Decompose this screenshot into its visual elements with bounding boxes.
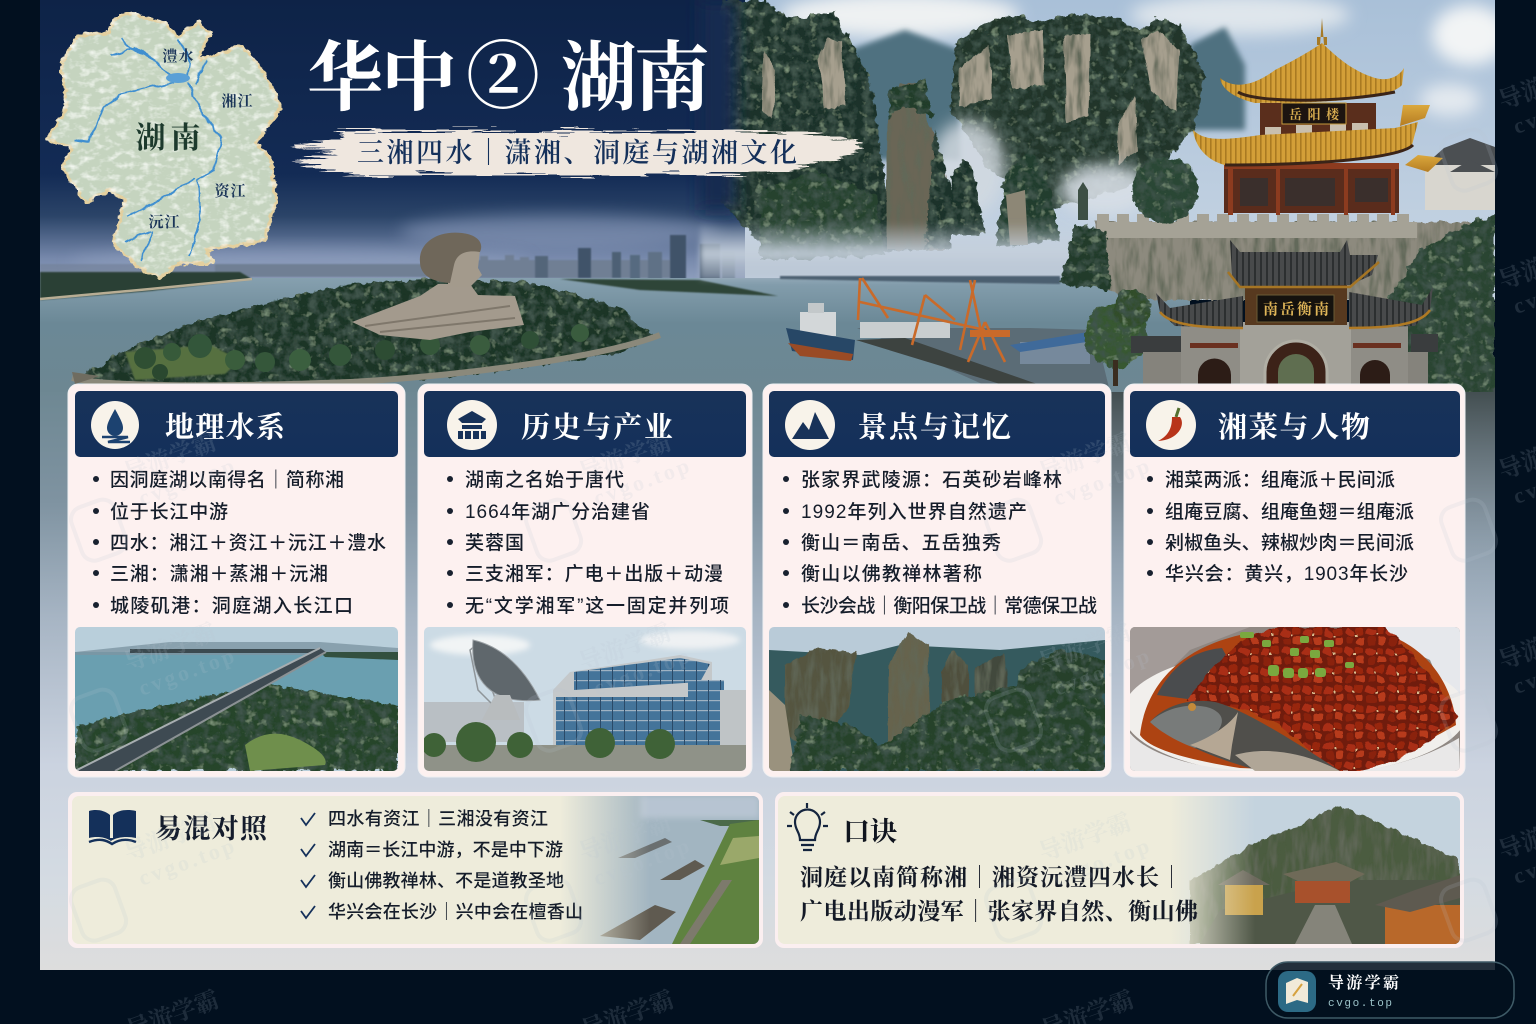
watermark tiles: cvgo.top [590,642,695,701]
white side building [1425,138,1495,210]
subtitle brush banner [288,131,860,175]
photo: bridge [75,627,398,771]
rock pillars [760,80,1060,260]
watermark tiles: 导游学霸 [1035,429,1135,487]
logo badge: 导游学霸 [1328,974,1399,992]
statue [352,233,524,340]
panel: mnemonic [775,792,1464,948]
bullet list: scenery: 张家界武陵源：石英砂岩峰林 [801,469,1062,491]
Nanyue gate: 南岳衡南 [1263,300,1329,318]
panel: cuisine and people [1123,384,1467,777]
watermark tiles: cvgo.top [135,832,240,891]
icon: palace [447,400,497,450]
watermark tiles: cvgo.top [135,642,240,701]
heading: mnemonic: 口诀 [843,817,897,847]
port with ship and cranes [786,278,1110,392]
check list: 华兴会在长沙｜兴中会在檀香山 [328,902,583,922]
bullet list: geography [93,469,386,617]
trees [1060,157,1495,400]
bullet list: cuisine: 华兴会：黄兴，1903年长沙 [1165,563,1408,585]
watermark tiles: cvgo.top [1050,642,1155,701]
icon: light bulb [787,803,828,850]
icon: water drop [91,401,139,449]
logo badge [1266,962,1514,1018]
mnemonic text [800,865,1198,924]
map of Hunan: 沅江 [148,213,180,231]
bullet list: cuisine: 组庵豆腐、组庵鱼翅＝组庵派 [1165,501,1414,523]
panel: scenery [763,384,1111,777]
mnemonic text: 广电出版动漫军｜张家界自然、衡山佛 [800,898,1198,924]
icon: chili pepper [1146,400,1196,450]
photo: chopped chili fish head [1123,627,1467,776]
Zhangjiajie peaks [720,0,1205,255]
watermark tiles: 导游学霸 [1035,619,1135,677]
photo: sandstone peaks [769,627,1105,771]
bullet list: geography: 三湘：潇湘＋蒸湘＋沅湘 [110,563,328,585]
hero landscape photo collage [40,0,1508,400]
map of Hunan: 湘江 [222,92,252,110]
map of Hunan: 湖南 [136,122,200,155]
mist band [700,222,1110,280]
icon: open book [89,810,136,844]
title: 湖南 [561,37,710,121]
bullet list: cuisine: 剁椒鱼头、辣椒炒肉＝民间派 [1165,532,1414,554]
Yueyang Tower: 岳阳楼 [1289,107,1340,122]
bullet list: history [447,468,729,617]
panel: geography [68,384,405,777]
island trees [134,324,589,380]
Nanyue gate [1131,240,1438,392]
watermark tiles: 导游学霸 [120,809,220,867]
watermark tiles: 导游学霸 [1035,809,1135,867]
bullet list: scenery: 衡山以佛教禅林著称 [801,563,982,585]
watermark tiles: 导游学霸 [120,619,220,677]
map of Hunan: 澧水 [162,47,194,65]
watermark tiles: cvgo.top [135,452,240,511]
bullet list: cuisine: 湘菜两派：组庵派＋民间派 [1165,469,1395,491]
photo: river port [560,796,759,944]
bullet list: scenery: 1992年列入世界自然遗产 [801,500,1027,523]
title: ② [466,37,540,119]
watermark tiles: 导游学霸 [120,429,220,487]
header: scenery: 景点与记忆 [858,411,1011,444]
check list [301,809,583,922]
watermark tiles: 导游学霸 [575,619,675,677]
Yueyang Tower [1193,18,1443,215]
check list: 衡山佛教禅林、不是道教圣地 [328,871,564,891]
watermark tiles: 导游学霸 [575,809,675,867]
title: 华中 [307,37,457,121]
watermark tiles: 导游学霸 [575,429,675,487]
bullet list: geography: 四水：湘江＋资江＋沅江＋澧水 [110,532,386,554]
header: scenery [769,391,1105,457]
panel: easily confused items [68,792,763,948]
heading: easily confused: 易混对照 [155,814,269,844]
bullet list: geography: 城陵矶港：洞庭湖入长江口 [110,595,353,617]
Orange Isle with statue [72,233,660,385]
photo: Nanyue mountain temple [1170,796,1460,944]
bullet list: geography: 位于长江中游 [110,501,228,523]
bullet list: geography: 因洞庭湖以南得名｜简称湘 [110,469,344,491]
mnemonic text: 洞庭以南简称湘｜湘资沅澧四水长｜ [800,865,1183,890]
bullet list: history: 湖南之名始于唐代 [465,468,624,491]
subtitle brush banner: 三湘四水｜潇湘、洞庭与湖湘文化 [357,138,797,168]
watermark tiles: cvgo.top [590,832,695,891]
watermark tiles: cvgo.top [590,452,695,511]
icon: mountains [785,400,835,450]
watermark tiles: cvgo.top [1050,452,1155,511]
check list: 湖南＝长江中游，不是中下游 [328,840,563,860]
title [307,37,710,121]
map of Hunan: 资江 [214,182,246,200]
bullet list: cuisine [1147,469,1414,585]
icon: app logo [1278,971,1316,1012]
header: history: 历史与产业 [521,411,673,444]
header: geography [75,391,398,457]
map of Hunan [47,13,281,278]
header: cuisine: 湘菜与人物 [1218,411,1370,444]
panel: history and industry [418,384,752,777]
header: history [424,391,746,457]
header: cuisine [1130,391,1460,457]
distant right bank [780,276,1060,284]
bullet list: history: 三支湘军：广电＋出版＋动漫 [465,563,723,585]
bullet list: scenery: 衡山＝南岳、五岳独秀 [801,532,1001,554]
bullet list: history: 芙蓉国 [465,532,524,554]
bullet list: scenery [783,469,1097,617]
far shore and skyline [40,235,735,281]
header: geography: 地理水系 [165,411,286,444]
check list: 四水有资江｜三湘没有资江 [328,809,548,829]
photo: satellite dish and glass building [422,627,746,771]
poster lower background [40,385,1495,970]
bullet list: history: 1664年湖广分治建省 [465,501,650,523]
city wall [1095,214,1483,300]
bullet list: history: 无“文学湘军”这一固定并列项 [465,595,729,617]
bullet list: scenery: 长沙会战｜衡阳保卫战｜常德保卫战 [801,595,1097,617]
right side rock fade [1105,385,1495,595]
watermark tiles: cvgo.top [1050,832,1155,891]
water [40,278,1190,392]
logo badge: cvgo.top [1328,998,1392,1010]
